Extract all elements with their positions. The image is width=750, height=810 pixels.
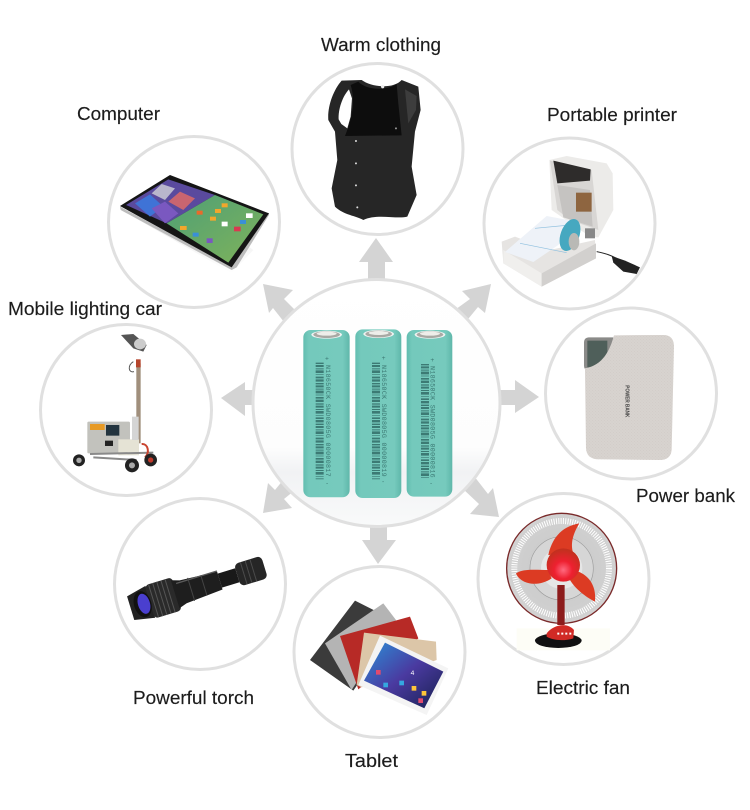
icon: power bank [584,335,674,460]
icon: stacked tablets: 4 [411,670,415,677]
icon: tablet computer [120,175,269,273]
arrow: to electric fan [462,476,499,517]
battery middle: + [382,355,386,362]
battery middle: - [382,478,384,485]
label: Computer: Computer [77,103,160,124]
panel: tablet [294,566,465,771]
arrow: to portable printer [452,284,491,324]
battery left: N18650CK SWD0805G 00000817 [324,365,332,477]
icon: table fan [507,513,617,650]
arrow: to mobile lighting car [221,382,270,416]
battery middle: N18650CK SWD0805G 00000819 [380,365,388,477]
battery right: + [430,357,434,364]
panel: mobile lighting car [8,298,212,496]
panel: center batteries [253,280,500,526]
panel: warm clothing [292,34,463,234]
label: Tablet: Tablet [345,750,399,771]
label: Portable printer: Portable printer [547,104,677,125]
arrow: to power bank [490,380,539,413]
icon: power bank: POWER BANK [623,385,629,418]
icon: black vest [328,80,421,220]
battery right [407,330,452,497]
arrow: to tablet [362,515,396,564]
label: Electric fan: Electric fan [536,677,630,698]
battery middle [355,329,401,498]
battery left [303,330,350,497]
battery right: N18650CK SWD0805G 00000816 [429,366,437,478]
arrow: to powerful torch [263,474,300,513]
panel: power bank [546,308,736,506]
battery right: - [430,480,432,487]
icon: label printer [502,156,640,287]
battery left: + [325,356,329,363]
arrow: up to warm clothing [359,238,393,290]
battery left: - [326,480,328,487]
label: Mobile lighting car: Mobile lighting car [8,298,162,319]
label: Warm clothing: Warm clothing [321,34,441,55]
panel: powerful torch [114,498,286,708]
label: Powerful torch: Powerful torch [133,687,254,708]
icon: stacked tablets [310,601,448,715]
arrow: to computer [263,284,300,327]
panel: portable printer [484,104,677,309]
panel: computer [77,103,280,308]
icon: torch [126,550,270,624]
label: Power bank: Power bank [636,485,736,506]
panel: electric fan [478,494,649,698]
icon: lighting cart [73,334,157,472]
